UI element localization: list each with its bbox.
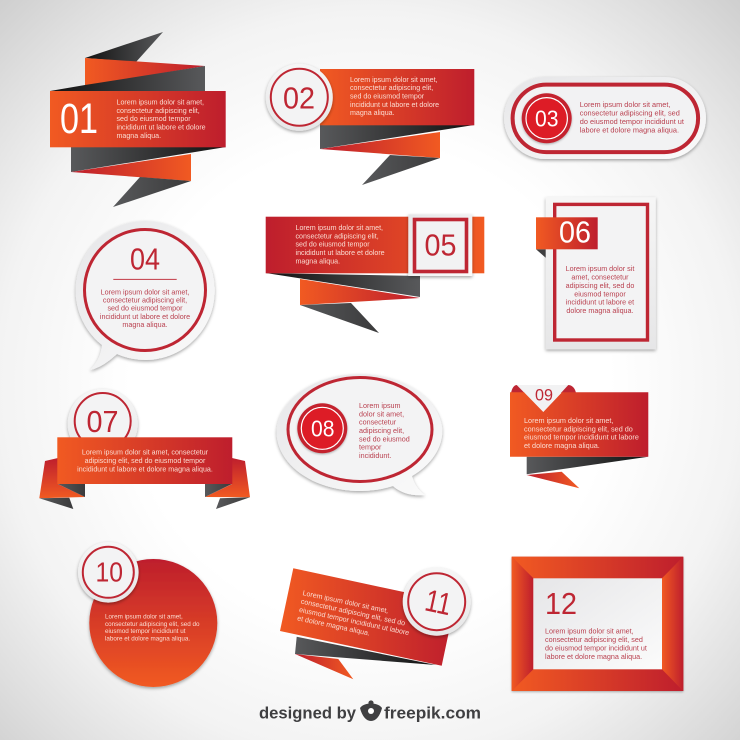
text block 08: dolor sit amet, <box>359 409 404 418</box>
text block 06: dolore magna aliqua. <box>566 306 634 315</box>
panel: card 06 <box>536 197 656 349</box>
text block 10: eiusmod tempor incididunt ut <box>105 628 186 635</box>
badge 10: 10 <box>96 556 123 587</box>
right tail tip <box>216 497 250 509</box>
freepik.com: freepik.com <box>384 704 481 722</box>
top orange fold <box>85 58 205 86</box>
text block 03: Lorem ipsum dolor sit amet, <box>580 100 670 109</box>
text block 09: consectetur adipiscing elit, sed do <box>524 424 633 433</box>
left tail tip <box>39 498 73 509</box>
outer frame <box>512 557 683 691</box>
panel: frame 12 <box>512 557 683 691</box>
panel: speech bubble 04 <box>76 221 215 370</box>
text block 09: et dolore magna aliqua. <box>524 441 600 450</box>
text block 06: Lorem ipsum dolor sit <box>566 264 634 273</box>
orange fold <box>527 472 579 488</box>
main band <box>320 69 474 125</box>
paper card <box>546 197 656 349</box>
text block 09: Lorem ipsum dolor sit amet, <box>524 416 613 425</box>
main band <box>280 568 455 666</box>
text block 10: labore et dolore magna aliqua. <box>105 636 190 643</box>
bubble shape with tail <box>277 374 442 495</box>
panel: tilted banner 11 <box>280 568 471 679</box>
text block 07: Lorem ipsum dolor sit amet, consectetur <box>82 449 209 457</box>
text block 11: eiusmod tempor incididunt ut labore <box>298 606 410 637</box>
text block 01: sed do eiusmod tempor <box>116 115 191 123</box>
text block 04: sed do eiusmod tempor <box>107 304 183 312</box>
text block 03: labore et dolore magna aliqua. <box>580 125 679 134</box>
red tab corners <box>511 385 576 393</box>
label fold <box>536 249 546 258</box>
badge 11: 11 <box>422 583 455 622</box>
outer pill <box>504 77 706 159</box>
badge 02 <box>266 64 333 131</box>
main band <box>266 217 484 273</box>
text block 10 <box>105 613 200 643</box>
red outline <box>513 85 698 152</box>
text block 11 <box>297 589 414 646</box>
text block 08: consectetur <box>359 418 397 427</box>
text block 06: amet, consectetur <box>571 272 629 282</box>
text block 05: incididunt ut labore et dolore <box>296 249 385 257</box>
text block 07: adipiscing elit, sed do eiusmod tempor <box>85 457 206 465</box>
right dark fold <box>205 484 232 497</box>
text block 05 <box>296 224 385 265</box>
main band with notch <box>510 392 648 457</box>
orange fold <box>300 279 420 305</box>
text block 07: incididunt ut labore et dolore magna aliqua. <box>77 466 213 474</box>
fold triangle <box>362 155 440 185</box>
text block 07 <box>77 449 213 474</box>
panel: banner 01 <box>50 32 226 207</box>
paper inset <box>533 578 662 669</box>
badge 05 <box>408 214 472 276</box>
white tab <box>517 385 568 412</box>
red frame <box>555 204 648 340</box>
text block 02 <box>350 76 439 117</box>
bottom fold triangle <box>113 177 191 207</box>
main band <box>50 91 226 147</box>
number 12: 12 <box>545 586 577 621</box>
badge 11 <box>403 568 471 636</box>
panel: pill 03 <box>504 77 706 159</box>
text block 03: consectetur adipiscing elit, sed <box>580 108 680 118</box>
badge 08: 08 <box>311 416 334 442</box>
panel: speech bubble 08 <box>277 374 442 495</box>
text block 02: consectetur adipiscing elit, <box>350 84 433 92</box>
text block 12: Lorem ipsum dolor sit amet, <box>545 627 634 636</box>
bottom dark fold <box>71 147 226 172</box>
red ring <box>288 378 432 482</box>
badge 10 <box>78 542 139 603</box>
text block 04 <box>100 287 190 329</box>
text block 01: magna aliqua. <box>116 132 161 140</box>
text block 04: magna aliqua. <box>122 320 168 329</box>
orange fold <box>320 132 440 158</box>
top dark fold <box>50 66 205 91</box>
badge 07: 07 <box>86 404 118 439</box>
text block 11: consectetur adipiscing elit, sed do <box>300 598 406 628</box>
badge 05: 05 <box>424 227 456 262</box>
text block 02: Lorem ipsum dolor sit amet, <box>350 76 438 84</box>
text block 06: eiusmod tempor <box>574 289 626 298</box>
text block 05: Lorem ipsum dolor sit amet, <box>296 224 383 232</box>
text block 09 <box>524 416 639 450</box>
number 09: 09 <box>535 385 553 404</box>
text block 05: consectetur adipiscing elit, <box>296 232 379 240</box>
red ring <box>84 230 206 350</box>
text block 06: incididunt ut labore et <box>566 298 634 307</box>
bottom bevel <box>512 669 683 691</box>
text block 11: et dolore magna aliqua. <box>297 614 371 638</box>
text block 11: Lorem ipsum dolor sit amet, <box>302 589 389 615</box>
top fold triangle <box>85 32 163 62</box>
panel: banner 09 <box>510 385 648 488</box>
dark fold <box>266 273 420 297</box>
icon: freepik crown <box>360 700 382 721</box>
footer logo <box>259 700 481 722</box>
designed by: designed by <box>259 704 357 722</box>
badge 03 <box>522 93 572 143</box>
text block 06: adipiscing elit, sed do <box>566 281 634 290</box>
dark fold <box>320 125 474 149</box>
text block 10: consectetur adipiscing elit, sed do <box>105 621 200 628</box>
text block 02: magna aliqua. <box>350 109 395 117</box>
text block 02: incididunt ut labore et dolore <box>350 101 439 109</box>
dark fold <box>527 457 648 474</box>
text block 09: eiusmod tempor incididunt ut labore <box>524 433 639 442</box>
bottom orange fold <box>71 154 191 181</box>
dark fold <box>295 637 436 665</box>
left bevel <box>512 557 533 691</box>
top bevel <box>512 557 683 578</box>
text block 03 <box>580 100 684 134</box>
text block 04: Lorem ipsum dolor sit amet, <box>101 287 189 296</box>
text block 12: do eiusmod tempor incididunt ut <box>545 644 647 653</box>
badge 08 <box>297 403 347 453</box>
text block 08: sed do eiusmod <box>359 434 410 443</box>
text block 01 <box>116 98 206 140</box>
text block 01: consectetur adipiscing elit, <box>116 107 200 115</box>
text block 12: consectetur adipiscing elit, sed <box>545 635 643 644</box>
right ribbon tail <box>205 458 250 497</box>
left dark fold <box>58 484 85 497</box>
text block 03: do eiusmod tempor incididunt ut <box>580 117 684 126</box>
text block 08: Lorem ipsum <box>359 401 401 410</box>
right bevel <box>662 557 683 691</box>
left ribbon tail <box>39 458 85 498</box>
number label <box>536 217 598 249</box>
text block 12: labore et dolore magna aliqua. <box>545 652 642 661</box>
main band <box>57 437 232 484</box>
text block 01: Lorem ipsum dolor sit amet, <box>116 98 204 106</box>
text block 12 <box>545 627 647 661</box>
text block 05: magna aliqua. <box>296 257 340 265</box>
number 06: 06 <box>559 214 591 250</box>
panel: banner 02 <box>266 64 474 185</box>
number 04: 04 <box>130 242 160 276</box>
number 01: 01 <box>60 95 98 143</box>
text block 04: consectetur adipiscing elit, <box>103 295 187 304</box>
panel: circle 10 <box>78 542 217 687</box>
text block 08: tempor <box>359 443 382 452</box>
panel: ribbon 07 <box>39 389 250 509</box>
badge 07 <box>68 389 138 459</box>
badge 02: 02 <box>283 80 315 116</box>
panel: banner 05 <box>266 214 484 333</box>
orange fold <box>295 654 353 679</box>
bubble shape with tail <box>76 221 215 370</box>
text block 04: incididunt ut labore et dolore <box>100 312 190 321</box>
text block 10: Lorem ipsum dolor sit amet, <box>105 613 183 620</box>
text block 06 <box>566 264 634 315</box>
fold triangle <box>300 303 379 333</box>
text block 08: adipiscing elit, <box>359 426 404 435</box>
text block 08 <box>359 401 410 460</box>
text block 08: incididunt. <box>359 451 391 460</box>
rule <box>113 278 177 281</box>
text block 05: sed do eiusmod tempor <box>296 241 370 249</box>
red circle <box>89 559 217 687</box>
badge 03: 03 <box>535 105 558 131</box>
text block 02: sed do eiusmod tempor <box>350 92 425 100</box>
text block 01: incididunt ut labore et dolore <box>116 124 206 132</box>
